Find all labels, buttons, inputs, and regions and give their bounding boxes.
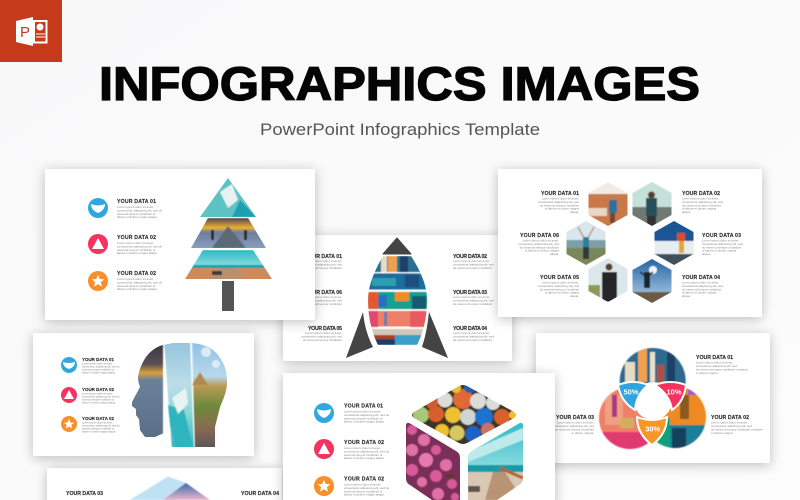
text: your data 05: do eiusmod tempor incididunt [540, 287, 579, 291]
head photo collage [132, 343, 227, 447]
text: your data 02: Lorem ipsum dolor sit amet, [82, 392, 113, 396]
text: your data 01: Lorem ipsum dolor sit amet, [117, 205, 154, 209]
text: your data 02: eiusmod tempor incididunt ut [82, 398, 114, 402]
icon: orange star [88, 271, 108, 291]
text: your data 06: consectetur adipiscing elit, sed [518, 242, 559, 246]
text: your data 01 [538, 191, 579, 214]
text: your data 05: YOUR DATA 05 [540, 275, 579, 281]
text: your data 01: YOUR DATA 01 [344, 404, 383, 410]
text: your data 02: Lorem ipsum dolor sit amet, [117, 241, 154, 245]
text: your data 02: Lorem ipsum dolor sit amet, [682, 196, 719, 200]
text: your data 05 [301, 326, 342, 342]
icon: red warning [314, 439, 334, 459]
text: your data 04: do eiusmod tempor incididunt [453, 338, 492, 342]
text: your data 01: et dolore magna. [696, 371, 719, 375]
text: your data 03 [553, 415, 594, 435]
icon: powerpoint badge: P [20, 24, 30, 41]
text: your data 02: Lorem ipsum dolor sit amet, [453, 259, 490, 263]
text: your data 05 [538, 275, 579, 298]
icon: red warning [88, 234, 108, 254]
text: your data 06 [301, 290, 342, 306]
tree tier 3 [183, 250, 275, 280]
rocket fin right [422, 312, 448, 358]
text: your data 03: consectetur adipiscing elit, sed [553, 424, 594, 428]
text: your data 01: do eiusmod tempor incididunt [540, 203, 579, 207]
text: your data 05: Lorem ipsum dolor sit amet, [542, 280, 579, 284]
text: your data 04: YOUR DATA 04 [453, 326, 487, 332]
photo hexagon 3 [654, 221, 694, 265]
photo hexagon 1 [588, 182, 628, 226]
text: your data 03: consectetur adipiscing elit, sed [702, 242, 743, 246]
text: your data 03 [453, 290, 494, 306]
text: your data 01: YOUR DATA 01 [541, 191, 579, 197]
text: your data 01: eiusmod tempor incididunt ut [82, 368, 114, 372]
text: your data 02: eiusmod tempor incididunt ut [117, 284, 156, 288]
text: your data 03: Lorem ipsum dolor sit amet, [453, 295, 490, 299]
text: your data 02 [117, 235, 162, 255]
text: your data 06: do eiusmod tempor incididunt [303, 302, 342, 306]
text: your data 02: eiusmod tempor incididunt ut [344, 489, 383, 493]
text: your data 02: et dolore magna. [711, 431, 734, 435]
tree trunk [222, 281, 234, 311]
text: your data 04: YOUR DATA 04 [241, 491, 279, 497]
text: your data 02: labore et dolore magna aliqua [82, 402, 116, 404]
text: your data 02: YOUR DATA 02 [82, 416, 115, 421]
text: your data 01: labore et dolore magna aliqua [82, 372, 116, 374]
text: your data 01: Lorem ipsum dolor sit amet, [305, 259, 342, 263]
text: your data 01: YOUR DATA 01 [696, 355, 733, 361]
text: your data 05: consectetur adipiscing elit, sed [538, 284, 579, 288]
text: your data 02: consectetur adipiscing elit, sed [711, 424, 752, 428]
text: your data 02 [117, 271, 162, 291]
icon: blue circle [88, 198, 108, 218]
text: your data 05: ut labore et dolore magna [545, 291, 579, 295]
venn center [634, 382, 672, 420]
icon: blue circle [61, 357, 77, 373]
text: your data 02: YOUR DATA 02 [117, 235, 156, 241]
icon: red warning [61, 387, 77, 403]
text: your data 04 [682, 275, 723, 298]
text: your data 03: YOUR DATA 03 [66, 491, 103, 497]
text: your data 03: do eiusmod tempor incididunt [702, 245, 741, 249]
text: your data 01: consectetur adipiscing elit, sed [538, 200, 579, 204]
text: your data 06: YOUR DATA 06 [520, 233, 559, 239]
text: your data 01 [82, 357, 120, 374]
text: your data 04: consectetur adipiscing elit, sed [682, 284, 723, 288]
text: your data 01: do eiusmod tempor incididunt [303, 266, 342, 270]
text: your data 02: eiusmod tempor incididunt ut [117, 248, 156, 252]
panel: head slide [33, 333, 254, 458]
rocket nose [383, 238, 411, 254]
text: your data 01: consectetur adipiscing elit, sed do [117, 208, 162, 212]
text: your data 01: Lorem ipsum dolor sit amet, [696, 360, 733, 364]
text: your data 04: do eiusmod tempor incididunt [682, 287, 721, 291]
text: your data 02: do eiusmod tempor incididunt [682, 203, 721, 207]
wedge: 50%: 50% [623, 388, 639, 396]
icon: orange star [314, 476, 334, 496]
text: your data 01 [344, 404, 389, 424]
text: your data 06: aliqua. [550, 252, 559, 256]
text: your data 01: consectetur adipiscing elit, sed do [82, 366, 120, 368]
text: your data 01 [696, 355, 748, 375]
text: your data 06: Lorem ipsum dolor sit amet, [305, 295, 342, 299]
text: your data 01: eiusmod tempor incididunt ut [117, 212, 156, 216]
icon: powerpoint badge [0, 0, 62, 62]
text: your data 01: YOUR DATA 01 [117, 199, 156, 205]
text: your data 02: Lorem ipsum dolor sit amet, [82, 422, 113, 424]
photo hexagon 6 [566, 221, 606, 265]
text: your data 01 [117, 199, 162, 219]
wedge: 30% [637, 417, 667, 445]
text: your data 02: do eiusmod tempor incididunt [453, 266, 492, 270]
subtitle: PowerPoint Infographics Template [260, 120, 540, 139]
text: your data 02: labore et dolore magna aliqua [82, 430, 116, 434]
text: your data 02 [344, 476, 389, 497]
text: your data 02: Lorem ipsum dolor sit amet, [344, 482, 381, 486]
cube right: sea and pier [468, 422, 523, 500]
text: your data 03 [702, 233, 743, 256]
text: your data 04 [453, 326, 494, 342]
text: your data 01: consectetur adipiscing elit, sed [696, 364, 737, 368]
text: your data 02: consectetur adipiscing elit, sed do [117, 280, 162, 284]
photo hexagon 4 [632, 259, 672, 303]
text: your data 02: labore et dolore magna aliqua [344, 493, 384, 497]
text: your data 02: Lorem ipsum dolor sit amet, [711, 420, 748, 424]
photo hexagon partially visible [130, 476, 210, 500]
text: your data 06: ut labore et dolore magna [525, 249, 559, 253]
text: your data 01: ut labore et dolore magna [545, 207, 579, 211]
text: your data 02: consectetur adipiscing elit, sed do [344, 449, 389, 453]
text: your data 03: ut labore et dolore magna [702, 249, 737, 253]
text: your data 03: YOUR DATA 03 [702, 233, 741, 239]
text: your data 02: YOUR DATA 02 [682, 191, 720, 197]
panel: venn slide [536, 333, 770, 465]
text: your data 05: YOUR DATA 05 [308, 326, 342, 332]
text: your data 05: aliqua. [570, 294, 579, 298]
text: your data 05: consectetur adipiscing elit, sed [301, 334, 342, 338]
text: your data 01: YOUR DATA 01 [305, 254, 342, 260]
text: your data 02: labore et dolore magna aliqua [117, 287, 157, 291]
text: your data 02 [344, 440, 389, 460]
title: INFOGRAPHICS IMAGES [99, 58, 700, 111]
text: your data 01: labore et dolore magna aliqua [344, 420, 384, 424]
text: your data 03: YOUR DATA 03 [556, 415, 594, 421]
text: your data 03: Lorem ipsum dolor sit amet, [557, 420, 594, 424]
text: your data 04: Lorem ipsum dolor sit amet, [682, 280, 719, 284]
cube top: coloured balls [412, 385, 516, 444]
text: your data 02: Lorem ipsum dolor sit amet, [344, 446, 381, 450]
text: your data 02: consectetur adipiscing elit, sed [682, 200, 723, 204]
text: your data 02: do eiusmod tempor incididunt ut labore [711, 428, 763, 432]
text: your data 04: aliqua. [682, 294, 691, 298]
text: your data 06: consectetur adipiscing elit, sed [301, 298, 342, 302]
text: your data 04: Lorem ipsum dolor sit amet, [453, 331, 490, 335]
text: your data 04: consectetur adipiscing elit, sed [453, 334, 494, 338]
text: your data 01 [301, 254, 342, 270]
text: your data 02: Lorem ipsum dolor sit amet, [117, 277, 154, 281]
text: your data 03: et dolore magna. [571, 431, 594, 435]
text: your data 01: labore et dolore magna aliqua [117, 215, 157, 219]
wedge: 10%: 10% [666, 388, 682, 396]
text: your data 02: ut labore et dolore magna [682, 207, 717, 211]
text: your data 02: labore et dolore magna aliqua [117, 251, 157, 255]
venn photo circles [598, 345, 707, 450]
tree tier 1 [200, 178, 256, 217]
text: your data 02: eiusmod tempor incididunt ut [344, 453, 383, 457]
text: your data 02 [453, 254, 494, 270]
text: your data 01: aliqua. [570, 210, 579, 214]
text: your data 02: aliqua. [682, 210, 691, 214]
text: your data 02: consectetur adipiscing elit, sed do [82, 396, 120, 398]
text: your data 02: consectetur adipiscing elit, sed [453, 262, 494, 266]
wedge: 30%: 30% [645, 424, 661, 434]
text: your data 04: ut labore et dolore magna [682, 291, 717, 295]
text: your data 01: YOUR DATA 01 [82, 357, 115, 362]
panel: tree slide [45, 169, 315, 322]
text: your data 02: consectetur adipiscing elit, sed do [344, 486, 389, 490]
text: your data 01: Lorem ipsum dolor sit amet, [542, 196, 579, 200]
panel: cube slide [283, 373, 555, 500]
text: your data 03: aliqua. [702, 252, 711, 256]
text: your data 03: do eiusmod tempor incididunt [555, 428, 594, 432]
text: your data 05: do eiusmod tempor incididunt [303, 338, 342, 342]
text: your data 05: Lorem ipsum dolor sit amet, [305, 331, 342, 335]
tree tier 2 [191, 218, 266, 248]
text: your data 01: eiusmod tempor incididunt ut [344, 416, 383, 420]
text: your data 02: YOUR DATA 02 [82, 387, 115, 392]
text: your data 02 [82, 416, 120, 434]
rocket fin left [346, 312, 373, 358]
text: your data 01: Lorem ipsum dolor sit amet, [82, 362, 113, 366]
text: your data 04: YOUR DATA 04 [682, 275, 720, 281]
text: your data 03: do eiusmod tempor incididunt [453, 302, 492, 306]
text: your data 02: labore et dolore magna aliqua [344, 456, 384, 460]
rocket body [365, 256, 430, 345]
text: your data 06 [518, 233, 559, 256]
wedge: 10% [655, 382, 686, 410]
text: your data 02: YOUR DATA 02 [344, 440, 384, 446]
text: your data 02: YOUR DATA 02 [344, 476, 384, 482]
wedge: 50% [618, 382, 648, 410]
text: your data 02: YOUR DATA 02 [711, 415, 749, 421]
panel: bottom slide [47, 468, 282, 500]
photo hexagon 2 [632, 182, 672, 226]
text: your data 03: Lorem ipsum dolor sit amet, [702, 238, 739, 242]
text: your data 01: consectetur adipiscing elit, sed [301, 262, 342, 266]
icon: orange star [61, 416, 77, 432]
text: your data 06: Lorem ipsum dolor sit amet, [522, 238, 559, 242]
text: your data 03: consectetur adipiscing elit, sed [453, 298, 494, 302]
text: your data 02: consectetur adipiscing elit, sed do [82, 424, 120, 428]
text: your data 06: do eiusmod tempor incididunt [520, 245, 559, 249]
text: your data 02: consectetur adipiscing elit, sed do [117, 244, 162, 248]
text: your data 02 [682, 191, 723, 214]
cube left: pink flowers [406, 422, 460, 500]
text: your data 02: YOUR DATA 02 [117, 271, 156, 277]
panel: rocket slide [283, 235, 512, 363]
text: your data 02: YOUR DATA 02 [453, 254, 487, 260]
text: your data 02 [711, 415, 763, 435]
photo hexagon 5 [588, 258, 628, 302]
text: your data 01: Lorem ipsum dolor sit amet, [344, 410, 381, 414]
text: your data 01: consectetur adipiscing elit, sed do [344, 413, 389, 417]
icon: blue circle [314, 403, 334, 423]
text: your data 02: eiusmod tempor incididunt ut [82, 428, 114, 430]
text: your data 02 [82, 387, 120, 404]
text: your data 03: YOUR DATA 03 [453, 290, 487, 296]
panel: hexagon slide [498, 169, 762, 319]
text: your data 06: YOUR DATA 06 [305, 290, 342, 296]
text: your data 01: do eiusmod tempor incididunt ut labore [696, 368, 748, 372]
